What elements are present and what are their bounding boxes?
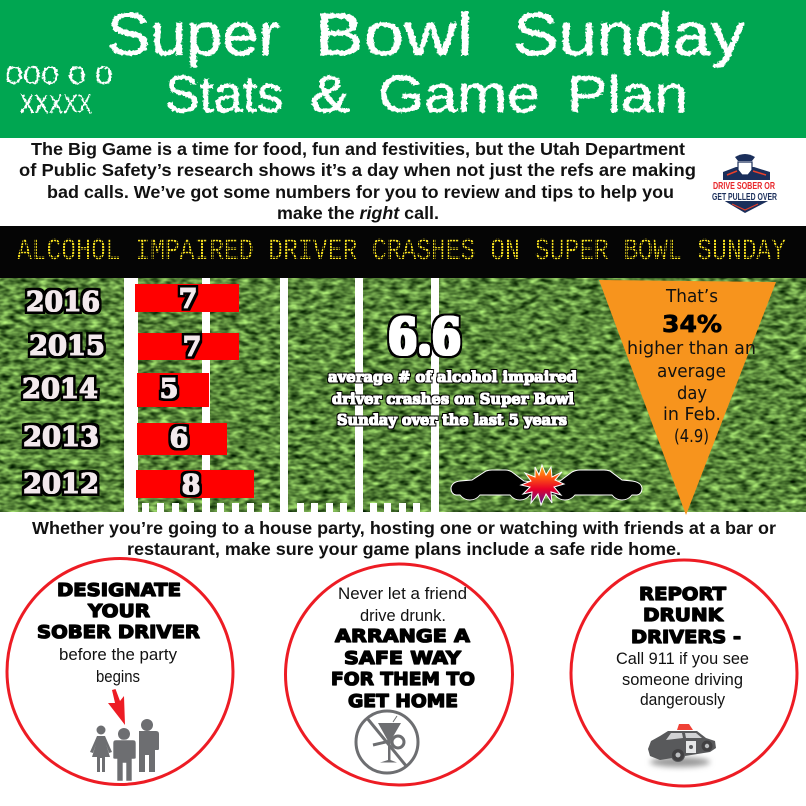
average caption: driver crashes on Super Bowl — [332, 390, 574, 408]
title: Stats — [165, 66, 283, 124]
bar 2016: 2016 — [26, 287, 100, 318]
logo: drive sober or get pulled over: DRIVE SOBER OR — [713, 181, 776, 192]
circle: report drunk drivers: Call 911 if you see — [616, 650, 749, 668]
play diagram marks: 000 0 0 — [5, 62, 113, 90]
circle: arrange a safe way home: Never let a friend — [338, 585, 467, 603]
bar 2014: 2014 — [22, 374, 98, 405]
circle: arrange a safe way home: drive drunk. — [360, 607, 446, 625]
bar 2015: 2015 — [29, 331, 105, 362]
average caption — [328, 368, 578, 429]
LED sign banner — [0, 226, 806, 278]
orange triangle callout — [599, 280, 776, 515]
bar 2012 — [23, 469, 254, 501]
title: & — [310, 66, 350, 124]
orange triangle callout: higher than an — [627, 338, 756, 359]
circle: report drunk drivers: dangerously — [640, 691, 726, 709]
icon: no drinking and driving — [356, 711, 418, 773]
bar 2012: 8 — [182, 470, 200, 501]
icon: police car — [648, 724, 716, 767]
average caption: Sunday over the last 5 years — [337, 411, 567, 429]
circle: arrange a safe way home: ARRANGE A — [335, 626, 470, 647]
average caption: average # of alcohol impaired — [328, 368, 578, 386]
average stat: 6.6: 6.6 — [388, 307, 461, 366]
bar 2015 — [29, 331, 239, 363]
logo: drive sober or get pulled over — [712, 154, 778, 213]
intro paragraph: make the right call. — [277, 203, 439, 223]
circle: report drunk drivers: REPORT — [639, 584, 727, 605]
play diagram marks: XXXXX — [20, 89, 92, 119]
game plan sentence: restaurant, make sure your game plans include a safe ride home. — [127, 539, 681, 559]
bar 2013 — [23, 422, 227, 455]
intro paragraph: of Public Safety’s research shows it’s a day when not just the refs are making — [19, 160, 696, 180]
orange triangle callout: day — [677, 383, 707, 404]
bar 2013: 6 — [170, 423, 188, 454]
game plan sentence — [32, 518, 776, 559]
circle: designate your sober driver: YOUR — [87, 601, 150, 622]
circle: report drunk drivers: someone driving — [622, 671, 743, 689]
title: Super — [107, 1, 280, 68]
intro paragraph — [19, 139, 696, 223]
orange triangle callout: That’s — [665, 286, 718, 307]
intro paragraph: The Big Game is a time for food, fun and festivities, but the Utah Department — [31, 139, 685, 159]
title — [107, 1, 745, 124]
icon: two cars crashing — [451, 465, 642, 505]
orange triangle callout: (4.9) — [674, 426, 709, 447]
icon: three people — [90, 719, 159, 781]
intro paragraph: bad calls. We’ve got some numbers for you to review and tips to help you — [47, 182, 674, 202]
bar 2012: 2012 — [23, 469, 99, 500]
circle: designate your sober driver: DESIGNATE — [57, 580, 181, 601]
bar chart: crashes by year — [22, 284, 254, 501]
game plan sentence: Whether you’re going to a house party, hosting one or watching with friends at a bar or — [32, 518, 776, 538]
title: Sunday — [513, 1, 745, 68]
orange triangle callout: average — [657, 361, 726, 382]
circle: designate your sober driver: before the party — [59, 646, 178, 664]
circle: designate your sober driver — [7, 558, 233, 784]
bar 2016 — [26, 284, 239, 318]
orange triangle callout: 34% — [662, 312, 722, 338]
crash burst — [521, 465, 564, 505]
circle: arrange a safe way home: SAFE WAY — [344, 648, 462, 669]
average stat: 6.6 — [328, 307, 578, 429]
icon: arrow pointing to driver — [108, 689, 125, 725]
logo: drive sober or get pulled over: GET PULLED OVER — [712, 192, 778, 203]
grass field — [0, 278, 806, 512]
bar 2013: 2013 — [23, 422, 99, 453]
circle: report drunk drivers: DRIVERS - — [631, 627, 741, 648]
circle: arrange a safe way home — [286, 564, 512, 785]
circle: arrange a safe way home: GET HOME — [348, 691, 458, 712]
circle: designate your sober driver: SOBER DRIVER — [37, 622, 200, 643]
bar 2014: 5 — [160, 374, 178, 405]
title: Plan — [567, 66, 688, 124]
header band — [0, 0, 806, 138]
orange triangle callout: in Feb. — [663, 404, 721, 425]
bar 2015: 7 — [183, 332, 201, 363]
circle: designate your sober driver: begins — [96, 668, 140, 686]
circle: arrange a safe way home: FOR THEM TO — [331, 669, 475, 690]
title: Bowl — [315, 1, 473, 68]
bar 2016: 7 — [179, 284, 197, 315]
play diagram marks — [5, 62, 113, 119]
title: Game — [378, 66, 540, 124]
bar 2014 — [22, 373, 209, 407]
circle: report drunk drivers: DRUNK — [643, 605, 724, 626]
circle: report drunk drivers — [571, 560, 797, 786]
